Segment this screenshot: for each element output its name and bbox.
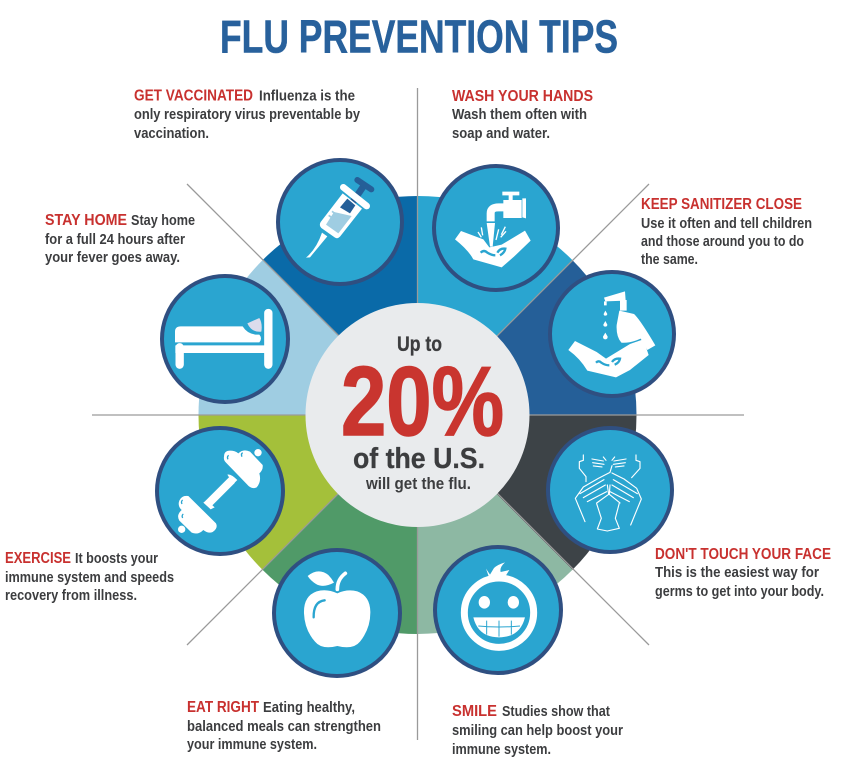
text: get vaccinated: Influenza is the	[259, 88, 355, 104]
icon: syringe	[278, 160, 402, 284]
center circle: up to 20%: Up to	[397, 333, 442, 356]
text: eat right: EAT RIGHT	[187, 699, 259, 716]
text: get vaccinated: GET VACCINATED	[134, 88, 253, 104]
text: eat right: balanced meals can strengthen	[187, 719, 381, 735]
text: eat right: your immune system.	[187, 737, 317, 753]
center circle: up to 20%: will get the flu.	[365, 475, 471, 493]
text: smile: smiling can help boost your	[452, 723, 623, 739]
text: keep sanitizer close: the same.	[641, 252, 698, 268]
text: wash your hands: soap and water.	[452, 126, 550, 142]
icon: smiling face	[435, 547, 561, 673]
center circle: up to 20%: of the U.S.	[353, 443, 485, 475]
text: exercise: EXERCISE	[5, 550, 71, 567]
text: smile	[452, 703, 623, 758]
text: keep sanitizer close	[641, 196, 812, 268]
text: get vaccinated	[134, 88, 360, 142]
icon: apple	[274, 550, 400, 676]
text: exercise: recovery from illness.	[5, 588, 137, 604]
center circle: up to 20%	[306, 303, 530, 527]
text: wash your hands: WASH YOUR HANDS	[452, 88, 593, 105]
center circle: up to 20%: 20%	[341, 346, 504, 456]
text: wash your hands: Wash them often with	[452, 107, 587, 123]
text: don't touch your face	[655, 546, 831, 600]
text: keep sanitizer close: and those around you to do	[641, 234, 804, 250]
text: smile: Studies show that	[502, 704, 610, 720]
icon: washing hands under faucet	[434, 166, 558, 290]
text: exercise: immune system and speeds	[5, 570, 174, 586]
text: exercise: It boosts your	[75, 551, 158, 567]
text: don't touch your face: This is the easiest way for	[655, 565, 819, 581]
text: eat right: Eating healthy,	[263, 700, 355, 716]
icon: hands covering face	[548, 428, 672, 552]
text: stay home: Stay home	[131, 213, 195, 229]
text: keep sanitizer close: KEEP SANITIZER CLOSE	[641, 196, 802, 213]
text: stay home: your fever goes away.	[45, 250, 180, 266]
text: exercise	[5, 550, 174, 604]
text: stay home: STAY HOME	[45, 212, 127, 229]
text: keep sanitizer close: Use it often and tell children	[641, 216, 812, 232]
text: smile: SMILE	[452, 703, 497, 720]
text: smile: immune system.	[452, 742, 551, 758]
wheel of eight coloured segments	[198, 196, 637, 634]
text: wash your hands	[452, 88, 593, 142]
text: get vaccinated: vaccination.	[134, 126, 209, 142]
text: stay home	[45, 212, 195, 266]
text: stay home: for a full 24 hours after	[45, 232, 185, 248]
text: eat right	[187, 699, 381, 753]
icon: dumbbell	[157, 428, 283, 554]
title: FLU PREVENTION TIPS	[220, 10, 618, 62]
icon: bed	[162, 276, 288, 402]
text: get vaccinated: only respiratory virus preventable by	[134, 107, 360, 123]
icon: sanitizer pump over hands	[550, 272, 674, 396]
